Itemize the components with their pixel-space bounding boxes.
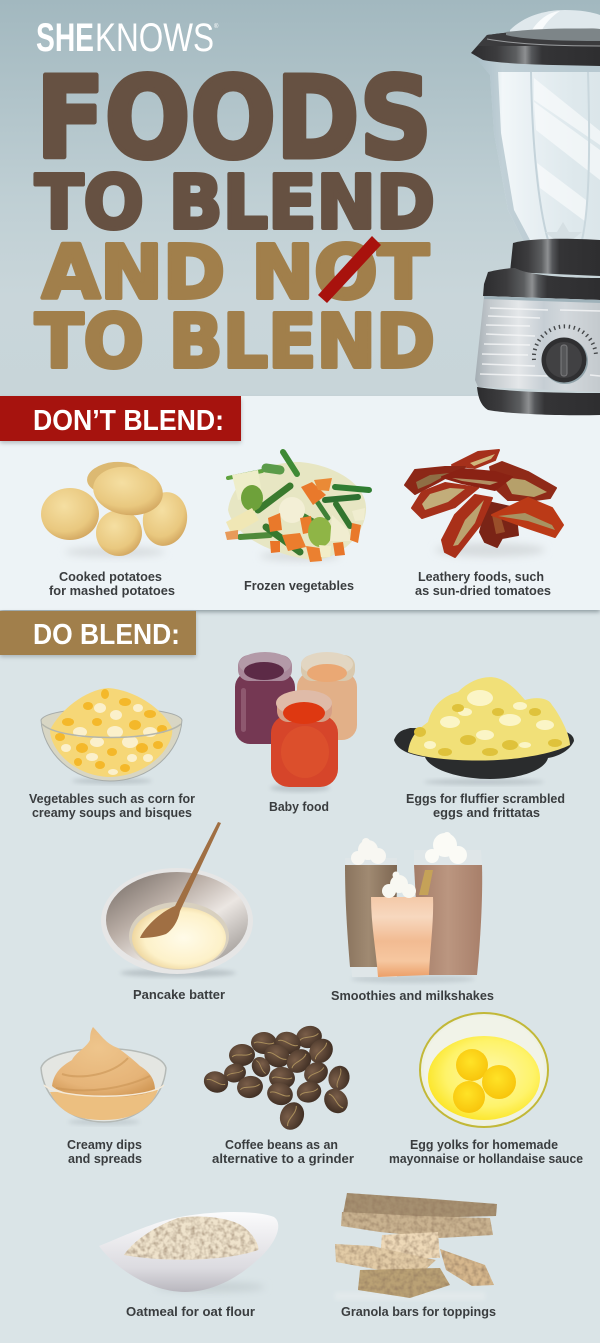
captions: row four bbox=[126, 1304, 496, 1319]
heading: don't blend bbox=[0, 396, 241, 443]
icon: corn in glass bowl bbox=[41, 688, 182, 784]
icon: granola bars bbox=[335, 1193, 497, 1300]
title: AND NOT bbox=[42, 230, 430, 316]
logo: SheKnows: SHE bbox=[36, 16, 94, 60]
captions: row three: alternative to a grinder bbox=[212, 1151, 354, 1166]
captions: row two bbox=[133, 987, 494, 1003]
captions: row one: Vegetables such as corn for bbox=[29, 791, 195, 806]
blender dome bbox=[510, 10, 600, 34]
top bar bbox=[343, 1193, 497, 1218]
red strike-through bbox=[318, 236, 381, 303]
captions: row three: and spreads bbox=[68, 1151, 142, 1166]
captions: row three: Creamy dips bbox=[67, 1137, 142, 1152]
blender base bbox=[477, 387, 600, 415]
blender dial bbox=[534, 326, 596, 384]
logo: SheKnows: KNOWS bbox=[95, 16, 214, 60]
captions: row one: Baby food bbox=[269, 799, 329, 814]
icon: smoothies and milkshakes bbox=[345, 832, 482, 983]
title: TO BLEND bbox=[35, 160, 435, 246]
captions: don't blend: Frozen vegetables bbox=[244, 578, 354, 593]
heading: don't blend: DON’T BLEND: bbox=[33, 405, 224, 437]
title: FOODS bbox=[36, 54, 432, 184]
left glass bbox=[345, 838, 397, 977]
captions: row three: mayonnaise or hollandaise sauce bbox=[389, 1151, 583, 1166]
icon: sun-dried tomatoes bbox=[405, 450, 563, 557]
bottom bar bbox=[358, 1268, 450, 1298]
heading: do blend: DO BLEND: bbox=[33, 619, 180, 651]
title bbox=[35, 54, 435, 385]
logo: SheKnows: ® bbox=[214, 23, 219, 30]
icon: egg yolks in bowl bbox=[420, 1013, 548, 1127]
blender shoulder bbox=[483, 268, 600, 300]
captions: row one: Eggs for fluffier scrambled bbox=[406, 791, 565, 806]
captions: row three: Coffee beans as an bbox=[225, 1137, 338, 1152]
icon: baby food jars bbox=[235, 652, 357, 792]
captions: row one bbox=[29, 791, 565, 820]
title: TO BLEND bbox=[35, 299, 435, 385]
icon: scrambled eggs on plate bbox=[394, 677, 574, 785]
captions: don't blend: Cooked potatoes bbox=[59, 569, 162, 584]
right bar bbox=[440, 1249, 494, 1286]
icon: pancake batter bbox=[101, 822, 253, 977]
captions: don't blend bbox=[49, 569, 551, 598]
icon: blender bbox=[471, 10, 600, 415]
tan jar bbox=[297, 652, 357, 740]
captions: row one: eggs and frittatas bbox=[433, 805, 540, 820]
icon: frozen vegetables bbox=[225, 452, 369, 562]
panel: don't blend bbox=[0, 396, 600, 612]
heading: do blend bbox=[0, 611, 196, 657]
icon: creamy dip bbox=[41, 1027, 166, 1125]
captions: row two: Pancake batter bbox=[133, 987, 225, 1002]
left bar bbox=[335, 1244, 436, 1270]
purple jar bbox=[235, 652, 295, 744]
wooden spoon bbox=[140, 822, 221, 938]
panel: do blend background bbox=[0, 610, 600, 1343]
middle small bar bbox=[380, 1232, 440, 1258]
header panel bbox=[0, 0, 600, 396]
captions: don't blend: for mashed potatoes bbox=[49, 583, 175, 598]
blender neck bbox=[510, 239, 600, 276]
blender body bbox=[475, 296, 600, 392]
captions: don't blend: Leathery foods, such bbox=[418, 569, 544, 584]
captions: row three: Egg yolks for homemade bbox=[410, 1137, 558, 1152]
logo: SheKnows bbox=[36, 16, 219, 60]
second bar bbox=[341, 1212, 493, 1238]
icon: potatoes bbox=[41, 460, 191, 557]
captions: don't blend: as sun-dried tomatoes bbox=[415, 583, 551, 598]
center glass bbox=[371, 872, 433, 977]
captions: row three bbox=[67, 1137, 583, 1166]
red jar bbox=[271, 690, 338, 787]
blender lid bbox=[471, 28, 600, 66]
captions: row two: Smoothies and milkshakes bbox=[331, 988, 494, 1003]
blender jar glass bbox=[475, 57, 600, 240]
right glass bbox=[414, 832, 482, 975]
captions: row one: creamy soups and bisques bbox=[32, 805, 192, 820]
captions: row four: Oatmeal for oat flour bbox=[126, 1304, 255, 1319]
icon: oatmeal in white bowl bbox=[99, 1212, 278, 1292]
captions: row four: Granola bars for toppings bbox=[341, 1304, 496, 1319]
icon: coffee beans bbox=[201, 1023, 353, 1134]
